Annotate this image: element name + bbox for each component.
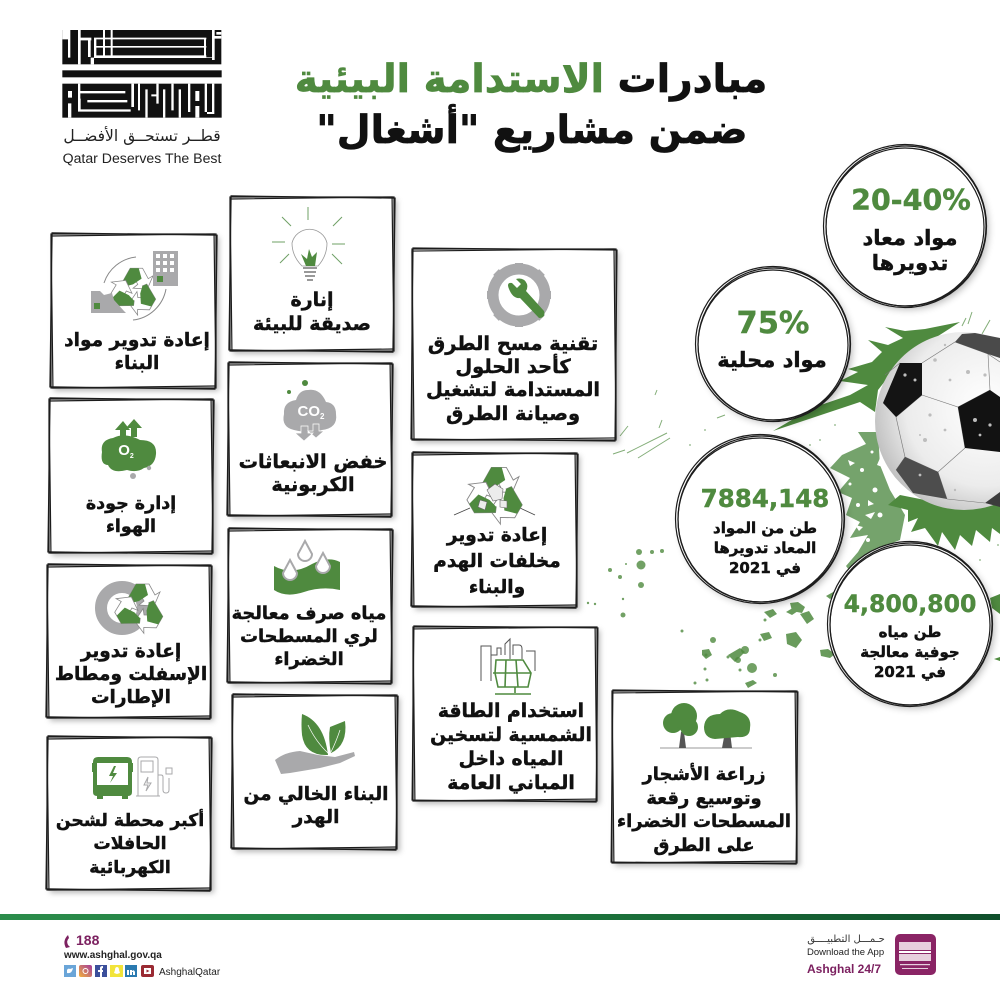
- panel: treated wastewater for irrigation: الخضراء: [274, 649, 344, 670]
- icon: phone: [64, 935, 70, 948]
- footer app block: [807, 934, 936, 976]
- icon: app tile: [895, 934, 936, 975]
- title: [295, 57, 767, 153]
- panel: treated wastewater for irrigation: لري المسطحات: [240, 626, 378, 647]
- panel: zero waste construction: البناء الخالي من: [243, 784, 389, 805]
- panel: zero waste construction: [231, 694, 398, 850]
- panel: tree planting: [611, 690, 798, 864]
- icon: tyre and recycling: [101, 584, 167, 637]
- panel: eco lighting: صديقة للبيئة: [253, 313, 371, 335]
- panel: road milling technology: تقنية مسح الطرق: [428, 332, 598, 355]
- stat circle: 7884,148: المعاد تدويرها: [714, 539, 816, 557]
- panel: road milling technology: كأحد الحلول: [455, 354, 571, 378]
- panel: solar energy: المياه داخل: [459, 749, 563, 770]
- stat circle: 4,800,800: طن مياه: [879, 623, 941, 641]
- stat circle: 4,800,800: [828, 542, 994, 708]
- icon: bus and charger: [92, 757, 172, 799]
- icon: oxygen cloud: O: [118, 442, 130, 459]
- panel: tree planting: المسطحات الخضراء: [617, 811, 791, 832]
- icon: gear and wrench: [487, 263, 551, 327]
- social icons: [64, 965, 154, 977]
- panel: recycling asphalt and tyres: الإسفلت ومطاط: [55, 664, 207, 685]
- panel: recycling asphalt and tyres: الإطارات: [91, 687, 171, 708]
- website: www.ashghal.gov.qa: [63, 950, 162, 961]
- icon: oxygen cloud: [102, 419, 156, 479]
- stat circle: 20-40%: 20-40%: [851, 184, 971, 217]
- panel: electric bus charging: أكبر محطة لشحن: [56, 809, 204, 831]
- logo English tagline: Qatar Deserves The Best: [63, 150, 221, 166]
- icon: light bulb with plant: [272, 207, 345, 281]
- title line 1: مبادرات الاستدامة البيئية: [295, 57, 767, 102]
- icon: hand holding leaves: [275, 714, 355, 774]
- panel: electric bus charging: الكهربائية: [89, 858, 171, 878]
- stat circle: 75%: 75%: [736, 306, 810, 341]
- panel: electric bus charging: الحافلات: [93, 834, 167, 854]
- panel: recycling demolition waste: إعادة تدوير: [446, 525, 547, 546]
- stat circle: 4,800,800: جوفية معالجة: [860, 643, 960, 661]
- stat circle: 20-40%: [824, 144, 988, 309]
- panel: solar energy: استخدام الطاقة: [438, 701, 584, 722]
- panel: recycling building materials: إعادة تدوير مواد: [64, 330, 210, 351]
- app Arabic label: حـمـــل التطبيــــق: [807, 934, 885, 945]
- icon: recycling rubble: [454, 467, 535, 529]
- stat circle: 4,800,800: في 2021: [874, 663, 946, 681]
- green paint splash behind the ball: [587, 312, 1000, 688]
- panel: road milling technology: [411, 248, 617, 441]
- icon: CO2 cloud: [283, 380, 336, 441]
- panel: zero waste construction: الهدر: [292, 807, 339, 828]
- panel: eco lighting: [229, 196, 395, 352]
- stat circle: 7884,148: 7884,148: [701, 484, 829, 513]
- stat circle: 20-40%: مواد معاد: [863, 226, 957, 250]
- stat circle: 4,800,800: 4,800,800: [844, 590, 976, 618]
- panel: eco lighting: إنارة: [291, 289, 333, 311]
- stat circle: 7884,148: طن من المواد: [713, 519, 817, 537]
- social handle: AshghalQatar: [159, 967, 221, 978]
- panel: tree planting: زراعة الأشجار: [642, 763, 766, 785]
- footer bar: [0, 914, 1000, 920]
- icon: CO2 cloud: CO: [298, 403, 320, 420]
- hotline number: 188: [76, 932, 100, 948]
- stat circle: 7884,148: [676, 434, 846, 605]
- panel: solar energy: الشمسية لتسخين: [430, 725, 592, 746]
- panel: air quality: الهواء: [106, 517, 156, 537]
- panel: tree planting: على الطرق: [653, 835, 755, 856]
- logo: Ashghal: [62, 30, 222, 166]
- panel: treated wastewater for irrigation: مياه صرف معالجة: [232, 603, 386, 624]
- stat circle: 7884,148: في 2021: [729, 559, 801, 577]
- title line 2: ضمن مشاريع "أشغال": [316, 104, 748, 153]
- panel: electric bus charging: [46, 736, 212, 891]
- icon: solar panels and buildings: [481, 639, 535, 694]
- panel: air quality: [48, 398, 214, 554]
- panel: solar energy: المباني العامة: [447, 773, 575, 794]
- panel: road milling technology: المستدامة لتشغيل: [426, 378, 600, 401]
- panel: air quality: إدارة جودة: [86, 494, 176, 514]
- panel: road milling technology: وصيانة الطرق: [446, 402, 580, 425]
- panel: recycling asphalt and tyres: [46, 564, 212, 719]
- panel: reducing carbon emissions: الكربونية: [271, 473, 355, 496]
- icon: oxygen cloud: 2: [130, 453, 134, 460]
- app name: Ashghal 24/7: [807, 962, 881, 976]
- panel: reducing carbon emissions: [227, 362, 393, 517]
- icon: recycling city: [91, 251, 178, 320]
- stat circle: 20-40%: تدويرها: [872, 251, 948, 275]
- soccer ball: [875, 332, 1000, 510]
- panel: reducing carbon emissions: خفض الانبعاثات: [239, 450, 387, 473]
- panel: recycling demolition waste: مخلفات الهدم: [433, 551, 561, 572]
- panel: solar energy: [412, 626, 598, 802]
- panel: recycling asphalt and tyres: إعادة تدوير: [80, 641, 181, 662]
- panel: recycling demolition waste: والبناء: [469, 577, 525, 598]
- panel: treated wastewater for irrigation: [227, 528, 393, 684]
- footer contact block: [63, 932, 221, 978]
- stat circle: 75%: [696, 266, 852, 423]
- app English label: Download the App: [807, 947, 884, 958]
- icon: trees: [660, 703, 752, 748]
- panel: tree planting: وتوسيع رقعة: [646, 788, 762, 809]
- panel: recycling demolition waste: [411, 452, 578, 608]
- icon: water drops on wave: [274, 541, 340, 595]
- logo Arabic tagline: قطــر تستحــق الأفضــل: [63, 126, 221, 145]
- logo kufic mark: [62, 30, 222, 118]
- stat circle: 75%: مواد محلية: [717, 348, 827, 372]
- panel: recycling building materials: البناء: [115, 353, 159, 374]
- panel: recycling building materials: [50, 233, 217, 389]
- icon: CO2 cloud: 2: [320, 412, 325, 421]
